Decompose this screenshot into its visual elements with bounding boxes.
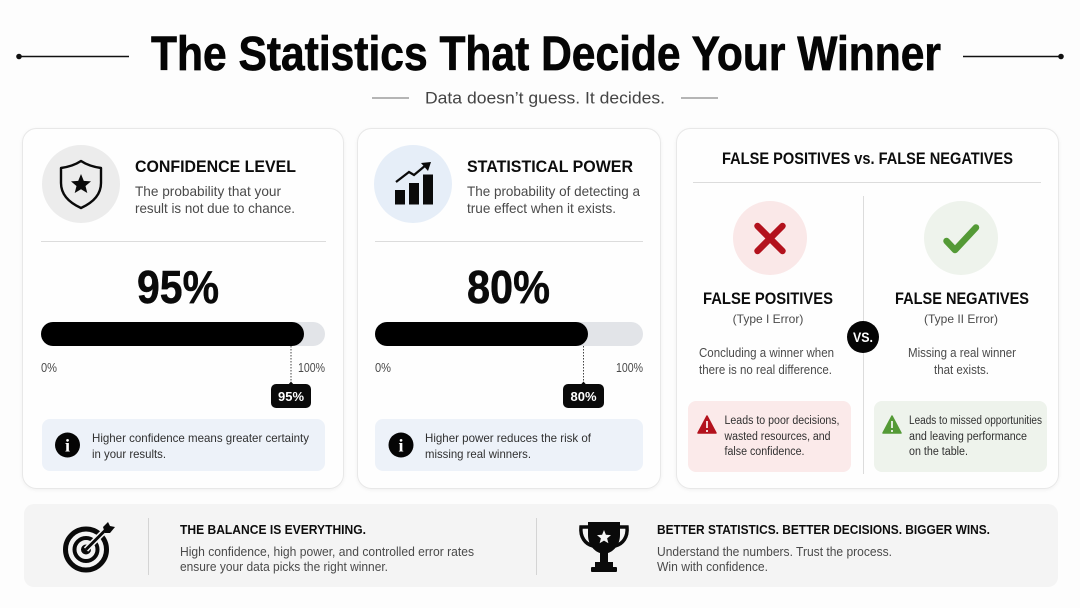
scale labels: 0% bbox=[41, 360, 57, 375]
callout: power: i bbox=[398, 436, 404, 456]
panel: confidence level bbox=[22, 128, 344, 488]
panel: false positives vs false negatives bbox=[676, 128, 1058, 488]
scale labels: 0% bbox=[375, 360, 391, 375]
text: balance: ensure your data picks the right winner. bbox=[180, 560, 388, 574]
subtitle: Data doesn’t guess. It decides. bbox=[425, 88, 665, 108]
description: statistical power: true effect when it exists. bbox=[467, 200, 616, 216]
marker: 95% bbox=[271, 346, 311, 408]
icon: rising bar chart bbox=[374, 145, 452, 223]
marker: 80%: 80% bbox=[570, 389, 597, 404]
callout: false positive risk: wasted resources, and bbox=[724, 431, 830, 443]
progress bar: 95% bbox=[41, 322, 325, 346]
type II label: (Type II Error) bbox=[924, 312, 998, 326]
text: better statistics bbox=[657, 545, 892, 574]
text: better statistics: Understand the numbers. Trust the process. bbox=[657, 545, 892, 559]
description: false positives bbox=[699, 346, 834, 377]
callout: false negative risk: and leaving performance bbox=[909, 431, 1027, 443]
icon: target with arrow bbox=[66, 522, 115, 570]
marker: 95%: 95% bbox=[278, 389, 304, 404]
panel heading: FALSE POSITIVES vs. FALSE NEGATIVES bbox=[722, 149, 1013, 168]
type I label: (Type I Error) bbox=[733, 312, 803, 326]
stat: 80%: 80% bbox=[467, 261, 550, 313]
vs badge: VS. bbox=[853, 329, 873, 345]
scale labels: 100% bbox=[298, 360, 325, 375]
callout: false positive risk bbox=[688, 401, 851, 472]
left title rule bbox=[16, 54, 129, 59]
heading: false positives: FALSE POSITIVES bbox=[703, 289, 833, 308]
callout: false positive risk: Leads to poor decisions, bbox=[724, 415, 840, 427]
callout: false negative risk: on the table. bbox=[909, 446, 968, 458]
right title rule bbox=[963, 54, 1064, 59]
description: false negatives: that exists. bbox=[934, 363, 989, 377]
vs badge bbox=[847, 321, 879, 353]
heading: statistical power: STATISTICAL POWER bbox=[467, 157, 633, 176]
panel: statistical power bbox=[358, 128, 660, 488]
description: false positives: Concluding a winner when bbox=[699, 346, 834, 360]
heading: balance: THE BALANCE IS EVERYTHING. bbox=[180, 522, 366, 537]
description: false negatives: Missing a real winner bbox=[908, 346, 1016, 360]
icon: red cross bbox=[733, 201, 807, 275]
icon: shield with star bbox=[42, 145, 120, 223]
callout: power: missing real winners. bbox=[425, 447, 531, 461]
text: balance bbox=[180, 545, 474, 574]
icon: green check bbox=[924, 201, 998, 275]
callout: false positive risk: false confidence. bbox=[724, 446, 804, 458]
icon: trophy bbox=[581, 522, 627, 572]
callout: false negative risk: Leads to missed opportunities bbox=[909, 415, 1042, 427]
callout: confidence: Higher confidence means greater certainty bbox=[92, 431, 309, 445]
callout: confidence bbox=[42, 419, 325, 471]
description: confidence level: The probability that your bbox=[135, 183, 281, 199]
callout: power bbox=[375, 419, 643, 471]
description: confidence level: result is not due to chance. bbox=[135, 200, 295, 216]
description: false negatives bbox=[908, 346, 1016, 377]
heading: better statistics: BETTER STATISTICS. BETTER DECISIONS. BIGGER WINS. bbox=[657, 522, 990, 537]
heading: confidence level: CONFIDENCE LEVEL bbox=[135, 157, 296, 176]
panel: bottom summary band bbox=[24, 504, 1058, 587]
text: better statistics: Win with confidence. bbox=[657, 560, 768, 574]
scale labels bbox=[375, 360, 643, 375]
stat: 95%: 95% bbox=[137, 261, 219, 313]
text: balance: High confidence, high power, and controlled error rates bbox=[180, 545, 474, 559]
heading: false negatives: FALSE NEGATIVES bbox=[895, 289, 1029, 308]
scale labels: 100% bbox=[616, 360, 643, 375]
description: false positives: there is no real difference. bbox=[699, 363, 832, 377]
description: statistical power: The probability of detecting a bbox=[467, 183, 640, 199]
callout: power: Higher power reduces the risk of bbox=[425, 431, 592, 445]
scale labels bbox=[41, 360, 325, 375]
description: statistical power bbox=[467, 183, 640, 216]
callout: false negative risk bbox=[874, 401, 1047, 472]
callout: confidence: in your results. bbox=[92, 447, 166, 461]
description: confidence level bbox=[135, 183, 295, 216]
title: The Statistics That Decide Your Winner bbox=[151, 28, 941, 81]
callout: confidence: i bbox=[65, 436, 70, 456]
progress bar: 80% bbox=[375, 322, 643, 346]
marker: 80% bbox=[563, 346, 604, 408]
